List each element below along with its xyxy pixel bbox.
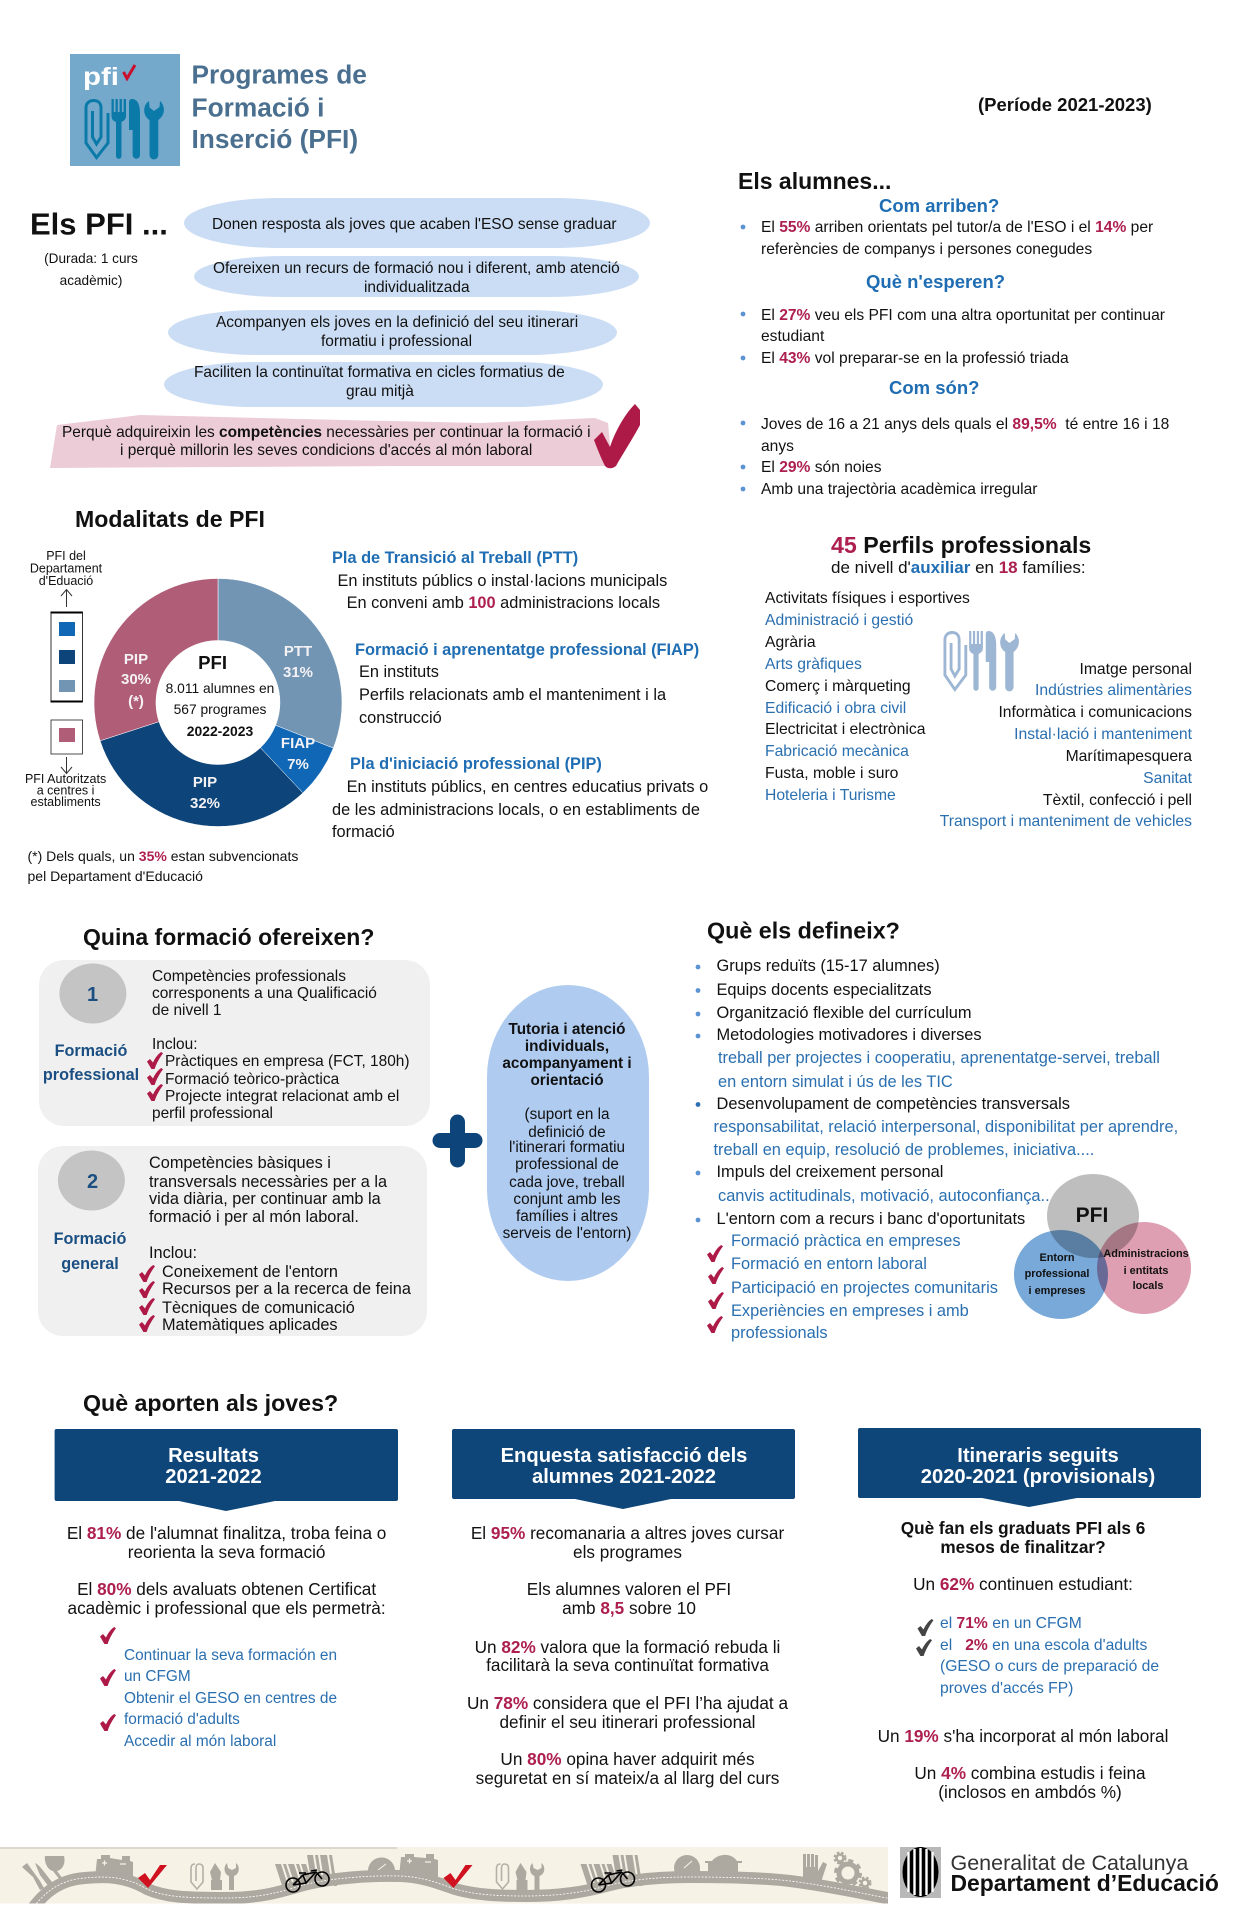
segment labels: PIP (193, 774, 217, 791)
logo wordmark: pfi (83, 63, 119, 91)
tutoria text: conjunt amb les (513, 1191, 621, 1208)
legend label: authorised: establiments (31, 795, 101, 809)
icon: plus (432, 1114, 483, 1168)
tutoria heading: orientació (530, 1072, 604, 1089)
families list left: Comerç i màrqueting (765, 678, 911, 695)
donut centre label: 8.011 alumnes en (166, 681, 274, 696)
bullet list: Equips docents especialitzats (716, 981, 932, 999)
legend box authorised (51, 720, 82, 754)
families list right: Transport i manteniment de vehicles (940, 813, 1192, 830)
legend box department (50, 612, 82, 702)
bullet trajectory: Amb una trajectòria acadèmica irregular (761, 481, 1038, 498)
environment list: professionals (731, 1324, 828, 1342)
FIAP description: Perfils relacionats amb el manteniment i la (359, 686, 667, 704)
number badge 2: 2 (87, 1171, 98, 1193)
segment PIP rose (94, 578, 218, 741)
tutoria text: famílies i altres (516, 1208, 618, 1225)
checks (916, 1619, 934, 1656)
families list right: Marítimapesquera (1066, 748, 1192, 765)
heading: Què els defineix: Què els defineix? (707, 918, 900, 944)
PIP description: formació (332, 823, 395, 841)
bullet ages (741, 416, 1169, 455)
bullet 27%: El 27% veu els PFI com una altra oportunitat per continuar (761, 307, 1165, 324)
description: Tècniques de comunicació (162, 1299, 355, 1317)
survey text: Un 82% valora que la formació rebuda li (475, 1637, 780, 1657)
road checks and bicycles (138, 1865, 634, 1892)
donut chart (94, 578, 342, 826)
label: Formació professional: professional (43, 1066, 139, 1084)
environment list: Formació en entorn laboral (731, 1255, 927, 1273)
bullet list: Desenvolupament de competències transversals (716, 1095, 1070, 1113)
bubble 3 (168, 310, 617, 355)
bullet list: Grups reduïts (15-17 alumnes) (716, 957, 940, 975)
families list left: Hoteleria i Turisme (765, 787, 896, 804)
results text: reorienta la seva formació (128, 1542, 325, 1562)
PTT description: Pla de Transició al Treball (PTT) (332, 549, 578, 567)
title: Inserció (PFI) (192, 124, 358, 154)
bullet list: responsabilitat, relació interpersonal, disponibilitat per aprendre, (714, 1118, 1178, 1136)
survey text: amb 8,5 sobre 10 (562, 1598, 696, 1618)
venn labels: PFI (1076, 1204, 1108, 1227)
bubble 3: formatiu i professional (321, 333, 472, 350)
bubble 4: grau mitjà (346, 383, 414, 400)
FIAP description: En instituts (359, 663, 439, 681)
outcomes list (124, 1647, 337, 1750)
description: Pràctiques en empresa (FCT, 180h) (165, 1053, 410, 1070)
families list left: Arts gràfiques (765, 656, 862, 673)
segment labels: 30% (121, 671, 151, 688)
road (30, 1876, 892, 1912)
description: Inclou: (149, 1244, 197, 1262)
header: Itineraris (858, 1428, 1201, 1507)
bubble 2 (194, 256, 639, 297)
header: Enquesta: alumnes 2021-2022 (532, 1466, 716, 1488)
study breakdown: el 2% en una escola d'adults (940, 1637, 1148, 1654)
checks (100, 1627, 116, 1731)
venn labels (1025, 1204, 1189, 1297)
fork, knife and glass (22, 1863, 53, 1890)
donut centre label: PFI (198, 652, 227, 673)
logo red check (124, 65, 135, 78)
venn labels: locals (1133, 1280, 1163, 1292)
families list left: Edificació i obra civil (765, 700, 906, 717)
gears (839, 1864, 857, 1882)
bullet list: Impuls del creixement personal (716, 1163, 943, 1181)
legend (25, 549, 106, 809)
question: Què fan els graduats PFI als 6 (901, 1518, 1145, 1538)
checks (147, 1052, 163, 1101)
bullet list: Organització flexible del currículum (716, 1004, 972, 1022)
tutoria heading: individuals, (525, 1038, 609, 1055)
survey text: Un 80% opina haver adquirit més (500, 1749, 755, 1769)
header: Itineraris: Itineraris seguits (957, 1445, 1119, 1467)
tutoria text: cada jove, treball (509, 1174, 625, 1191)
title: Formació i (192, 92, 324, 122)
tutoria text (503, 1106, 631, 1242)
bullet ages: Joves de 16 a 21 anys dels quals el 89,5% té entre 16 i 18 (761, 416, 1169, 433)
families list left (765, 590, 970, 804)
segment labels: 7% (287, 756, 309, 773)
outcomes list: un CFGM (124, 1668, 191, 1685)
survey text (467, 1523, 788, 1788)
callout: competences: i perquè millorin les seves condicions d'accés al món laboral (120, 442, 532, 459)
segment labels (121, 643, 315, 812)
dome (705, 1855, 742, 1876)
number badge 1: 1 (87, 984, 98, 1006)
title (192, 60, 367, 154)
bubble 4: Faciliten la continuïtat formativa en cicles formatius de (194, 364, 565, 381)
outcomes list: Obtenir el GESO en centres de (124, 1690, 337, 1707)
duration note: acadèmic) (60, 273, 122, 288)
bullet ages: anys (761, 438, 794, 455)
bullet 27%: estudiant (761, 328, 825, 345)
heading: Els PFI: Els PFI ... (30, 206, 168, 242)
PTT description: En conveni amb 100 administracions locals (347, 594, 660, 612)
segment PIP navy (100, 722, 303, 826)
heading: Què aporten als joves: Què aporten als joves? (83, 1390, 338, 1416)
description: de nivell 1 (152, 1002, 222, 1019)
header: Resultats: Resultats (168, 1445, 259, 1467)
panel: Enquesta satisfacció (452, 1429, 795, 1788)
venn diagram (1014, 1174, 1191, 1319)
bullet 29%: El 29% són noies (761, 459, 882, 476)
panel: tutoria (487, 985, 649, 1281)
bullet list: treball en equip, resolució de problemes, iniciativa.... (714, 1141, 1094, 1159)
FIAP description: Formació i aprenentatge professional (FIAP) (355, 641, 699, 659)
duration note: (Durada: 1 curs (44, 251, 138, 266)
description: formació i per al món laboral. (149, 1208, 359, 1226)
results text: El 80% dels avaluats obtenen Certificat (77, 1579, 376, 1599)
survey text: facilitarà la seva continuïtat formativa (486, 1655, 769, 1675)
legend label: department: PFI del (46, 549, 86, 563)
wordmark (950, 1851, 1219, 1896)
description: Competències bàsiques i (149, 1154, 331, 1172)
period label: (Període 2021-2023) (978, 94, 1152, 115)
venn labels: professional (1025, 1268, 1089, 1280)
subheading: Què n'esperen: Què n'esperen? (866, 271, 1005, 292)
environment list: Experiències en empreses i amb (731, 1302, 969, 1320)
PTT description: En instituts públics o instal·lacions municipals (338, 572, 667, 590)
survey text: els programes (573, 1542, 682, 1562)
header: Resultats (55, 1429, 398, 1511)
legend label: authorised: a centres i (37, 784, 94, 798)
emblem (900, 1847, 941, 1898)
description: Inclou: (152, 1036, 197, 1053)
survey text: seguretat en sí mateix/a al llarg del curs (476, 1768, 779, 1788)
PIP description: Pla d'iniciació professional (PIP) (350, 755, 602, 773)
logo tools icon (86, 99, 164, 159)
segment FIAP (260, 725, 333, 793)
PIP description: de les administracions locals, o en establiments de (332, 801, 700, 819)
header: Enquesta (452, 1429, 795, 1509)
panel: modality descriptions (332, 549, 708, 841)
FIAP description (355, 641, 699, 727)
panel: Resultats (55, 1429, 398, 1750)
venn labels: i empreses (1029, 1285, 1085, 1297)
families list right: Tèxtil, confecció i pell (1043, 792, 1192, 809)
tutoria heading: acompanyament i (502, 1055, 632, 1072)
description: Matemàtiques aplicades (162, 1316, 338, 1334)
19% line: Un 19% s'ha incorporat al món laboral (878, 1726, 1168, 1746)
description: Formació teòrico-pràctica (165, 1071, 340, 1088)
environment list: Participació en projectes comunitaris (731, 1279, 998, 1297)
number badge 1 (59, 964, 126, 1024)
segment labels: (*) (128, 693, 144, 710)
wordmark: Generalitat de Catalunya (950, 1851, 1188, 1875)
segment labels: PTT (284, 643, 312, 660)
bullet list: en entorn simulat i ús de les TIC (718, 1073, 953, 1091)
description: Projecte integrat relacionat amb el (165, 1088, 399, 1105)
wordmark: Departament d’Educació (950, 1870, 1219, 1896)
panel: Formació general (38, 1146, 427, 1336)
families list right: Instal·lació i manteniment (1014, 726, 1193, 743)
callout: competences (50, 415, 612, 468)
heading: Modalitats de PFI: Modalitats de PFI (75, 506, 265, 532)
description: transversals necessàries per a la (149, 1173, 388, 1191)
segment labels: 32% (190, 795, 220, 812)
families list left: Agrària (765, 634, 816, 651)
header: Itineraris: 2020-2021 (provisionals) (921, 1466, 1155, 1488)
bubble 2: Ofereixen un recurs de formació nou i diferent, amb atenció (213, 260, 620, 277)
outcomes list: formació d'adults (124, 1711, 240, 1728)
survey text: El 95% recomanaria a altres joves cursar (471, 1523, 784, 1543)
PIP description (332, 755, 708, 841)
logo: PFI (70, 54, 180, 166)
bullet list (696, 957, 1178, 1228)
bullet 55% (741, 219, 1153, 258)
number badge 2 (58, 1150, 125, 1210)
tutoria heading (502, 1021, 632, 1089)
tutoria text: professional de (515, 1156, 619, 1173)
panel: Què els defineix (696, 918, 1178, 1342)
battery 2 (399, 1854, 438, 1878)
callout: competences: Perquè adquireixin les competències necessàries per continuar la formació i (62, 424, 591, 441)
panel: Itineraris seguits (858, 1428, 1201, 1802)
legend label: department: Departament (30, 562, 103, 576)
outcomes list: Continuar la seva formación en (124, 1647, 337, 1664)
gauge 2 (674, 1855, 700, 1875)
description: vida diària, per continuar amb la (149, 1190, 382, 1208)
families list right (940, 661, 1193, 830)
bubble 2: individualitzada (364, 279, 470, 296)
venn labels: i entitats (1124, 1265, 1168, 1277)
families list left: Fusta, moble i suro (765, 765, 899, 782)
segment labels: 31% (283, 664, 313, 681)
footnote (28, 848, 298, 884)
4% line (914, 1763, 1146, 1802)
segment labels: PIP (124, 651, 148, 668)
hand (803, 1854, 827, 1882)
families list right: Sanitat (1143, 770, 1193, 787)
study breakdown: (GESO o curs de preparació de (940, 1658, 1159, 1675)
venn labels: Administracions (1103, 1248, 1189, 1260)
label: Formació general: general (61, 1255, 119, 1273)
results text: acadèmic i professional que els permetrà: (68, 1598, 386, 1618)
heading: 45 perfils: 45 Perfils professionals (831, 532, 1091, 558)
study breakdown: proves d'accés FP) (940, 1680, 1073, 1697)
question (901, 1518, 1145, 1557)
PTT description (332, 549, 667, 612)
arrow up (61, 590, 72, 607)
description: Coneixement de l'entorn (162, 1263, 338, 1281)
segment PTT (218, 578, 342, 748)
mask below band (0, 1847, 898, 1920)
legend label: authorised: PFI Autoritzats (25, 772, 106, 786)
survey text: definir el seu itinerari professional (499, 1712, 756, 1732)
description: corresponents a una Qualificació (152, 985, 377, 1002)
legend label: department (30, 549, 103, 588)
logo: Generalitat de Catalunya (900, 1847, 1219, 1898)
tutoria text: definició de (528, 1124, 606, 1141)
donut centre label (166, 652, 274, 739)
panel: Formació professional (39, 960, 430, 1126)
battery (95, 1855, 133, 1879)
duration note (44, 251, 138, 288)
segment labels: FIAP (281, 735, 315, 752)
families list left: Electricitat i electrònica (765, 721, 926, 738)
FIAP description: construcció (359, 709, 442, 727)
footnote: (*) Dels quals, un 35% estan subvencionats (28, 848, 298, 864)
families list right: Indústries alimentàries (1035, 682, 1192, 699)
panel: what PFI are (50, 198, 650, 468)
62% line: Un 62% continuen estudiant: (913, 1574, 1133, 1594)
description (152, 968, 410, 1122)
question: mesos de finalitzar? (940, 1537, 1106, 1557)
PIP description: En instituts públics, en centres educatius privats o (347, 778, 708, 796)
results text (67, 1523, 386, 1618)
header: Enquesta: Enquesta satisfacció dels (501, 1445, 747, 1467)
icon: tools (945, 631, 1019, 691)
bullet 55%: referències de companys i persones conegudes (761, 241, 1092, 258)
title: Programes de (192, 60, 367, 90)
tutoria heading: Tutoria i atenció (508, 1021, 626, 1038)
bubble 3: Acompanyen els joves en la definició del seu itinerari (216, 314, 578, 331)
environment list: Formació pràctica en empreses (731, 1232, 961, 1250)
4% line: Un 4% combina estudis i feina (914, 1763, 1146, 1783)
environment list (731, 1232, 998, 1342)
study breakdown (940, 1615, 1159, 1697)
description: Competències professionals (152, 968, 346, 985)
survey text: Els alumnes valoren el PFI (527, 1579, 731, 1599)
bullet list: L'entorn com a recurs i banc d'oportunitats (716, 1210, 1025, 1228)
label: Formació general: Formació (54, 1230, 127, 1248)
bullet 43%: El 43% vol preparar-se en la professió triada (761, 350, 1069, 367)
checks (139, 1265, 155, 1332)
bullet list: canvis actitudinals, motivació, autoconfiança... (718, 1187, 1054, 1205)
donut centre label: 567 programes (174, 702, 266, 717)
families list right: Imatge personal (1080, 661, 1192, 678)
subheading: Com són: Com són? (889, 377, 979, 398)
checks (707, 1245, 724, 1333)
results text: El 81% de l'alumnat finalitza, troba feina o (67, 1523, 386, 1543)
header: Resultats: 2021-2022 (165, 1466, 262, 1488)
venn labels: Entorn (1039, 1252, 1075, 1264)
bubble 4 (164, 362, 603, 407)
description (149, 1154, 412, 1334)
gauge (368, 1857, 395, 1877)
footnote: pel Departament d'Educació (28, 868, 203, 884)
study breakdown: el 71% en un CFGM (940, 1615, 1082, 1632)
label: Formació general (54, 1230, 127, 1273)
families list left: Fabricació mecànica (765, 743, 909, 760)
bubble 1: Donen resposta als joves que acaben l'ESO sense graduar (212, 216, 617, 233)
donut centre label: 2022-2023 (187, 723, 253, 739)
icon: large check (594, 404, 640, 468)
tutoria text: (suport en la (524, 1106, 610, 1123)
panel: Els alumnes (738, 168, 1169, 498)
arrow down (61, 757, 72, 774)
tutoria text: l'itinerari formatiu (509, 1139, 625, 1156)
families list left: Administració i gestió (765, 612, 913, 629)
bullet 55%: El 55% arriben orientats pel tutor/a de l'ESO i el 14% per (761, 219, 1153, 236)
legend label: authorised (25, 772, 106, 809)
subheading: Com arriben: Com arriben? (879, 195, 999, 216)
heading: Quina formació ofereixen: Quina formació ofereixen? (83, 924, 374, 950)
bullet list: treball per projectes i cooperatiu, aprenentatge-servei, treball (718, 1049, 1160, 1067)
families list left: Activitats físiques i esportives (765, 590, 970, 607)
legend label: department: d'Eduació (39, 574, 93, 588)
bullet list: Metodologies motivadores i diverses (716, 1026, 982, 1044)
bubble 1 (184, 198, 650, 248)
bullet 27% (741, 307, 1165, 345)
tutoria text: serveis de l'entorn) (503, 1225, 631, 1242)
label: Formació professional (43, 1042, 139, 1084)
survey text: Un 78% considera que el PFI l’ha ajudat a (467, 1693, 788, 1713)
subheading: families: de nivell d'auxiliar en 18 famílies: (831, 558, 1086, 577)
description: Recursos per a la recerca de feina (162, 1280, 412, 1298)
families list right: Informàtica i comunicacions (998, 704, 1192, 721)
heading: Els alumnes: Els alumnes... (738, 168, 891, 194)
grey silhouettes (22, 1852, 870, 1890)
outcomes list: Accedir al món laboral (124, 1733, 276, 1750)
description: perfil professional (152, 1105, 273, 1122)
4% line: (inclosos en ambdós %) (938, 1782, 1122, 1802)
footer road band (0, 1847, 898, 1920)
label: Formació professional: Formació (55, 1042, 128, 1060)
panel: Perfils professionals (765, 532, 1193, 830)
